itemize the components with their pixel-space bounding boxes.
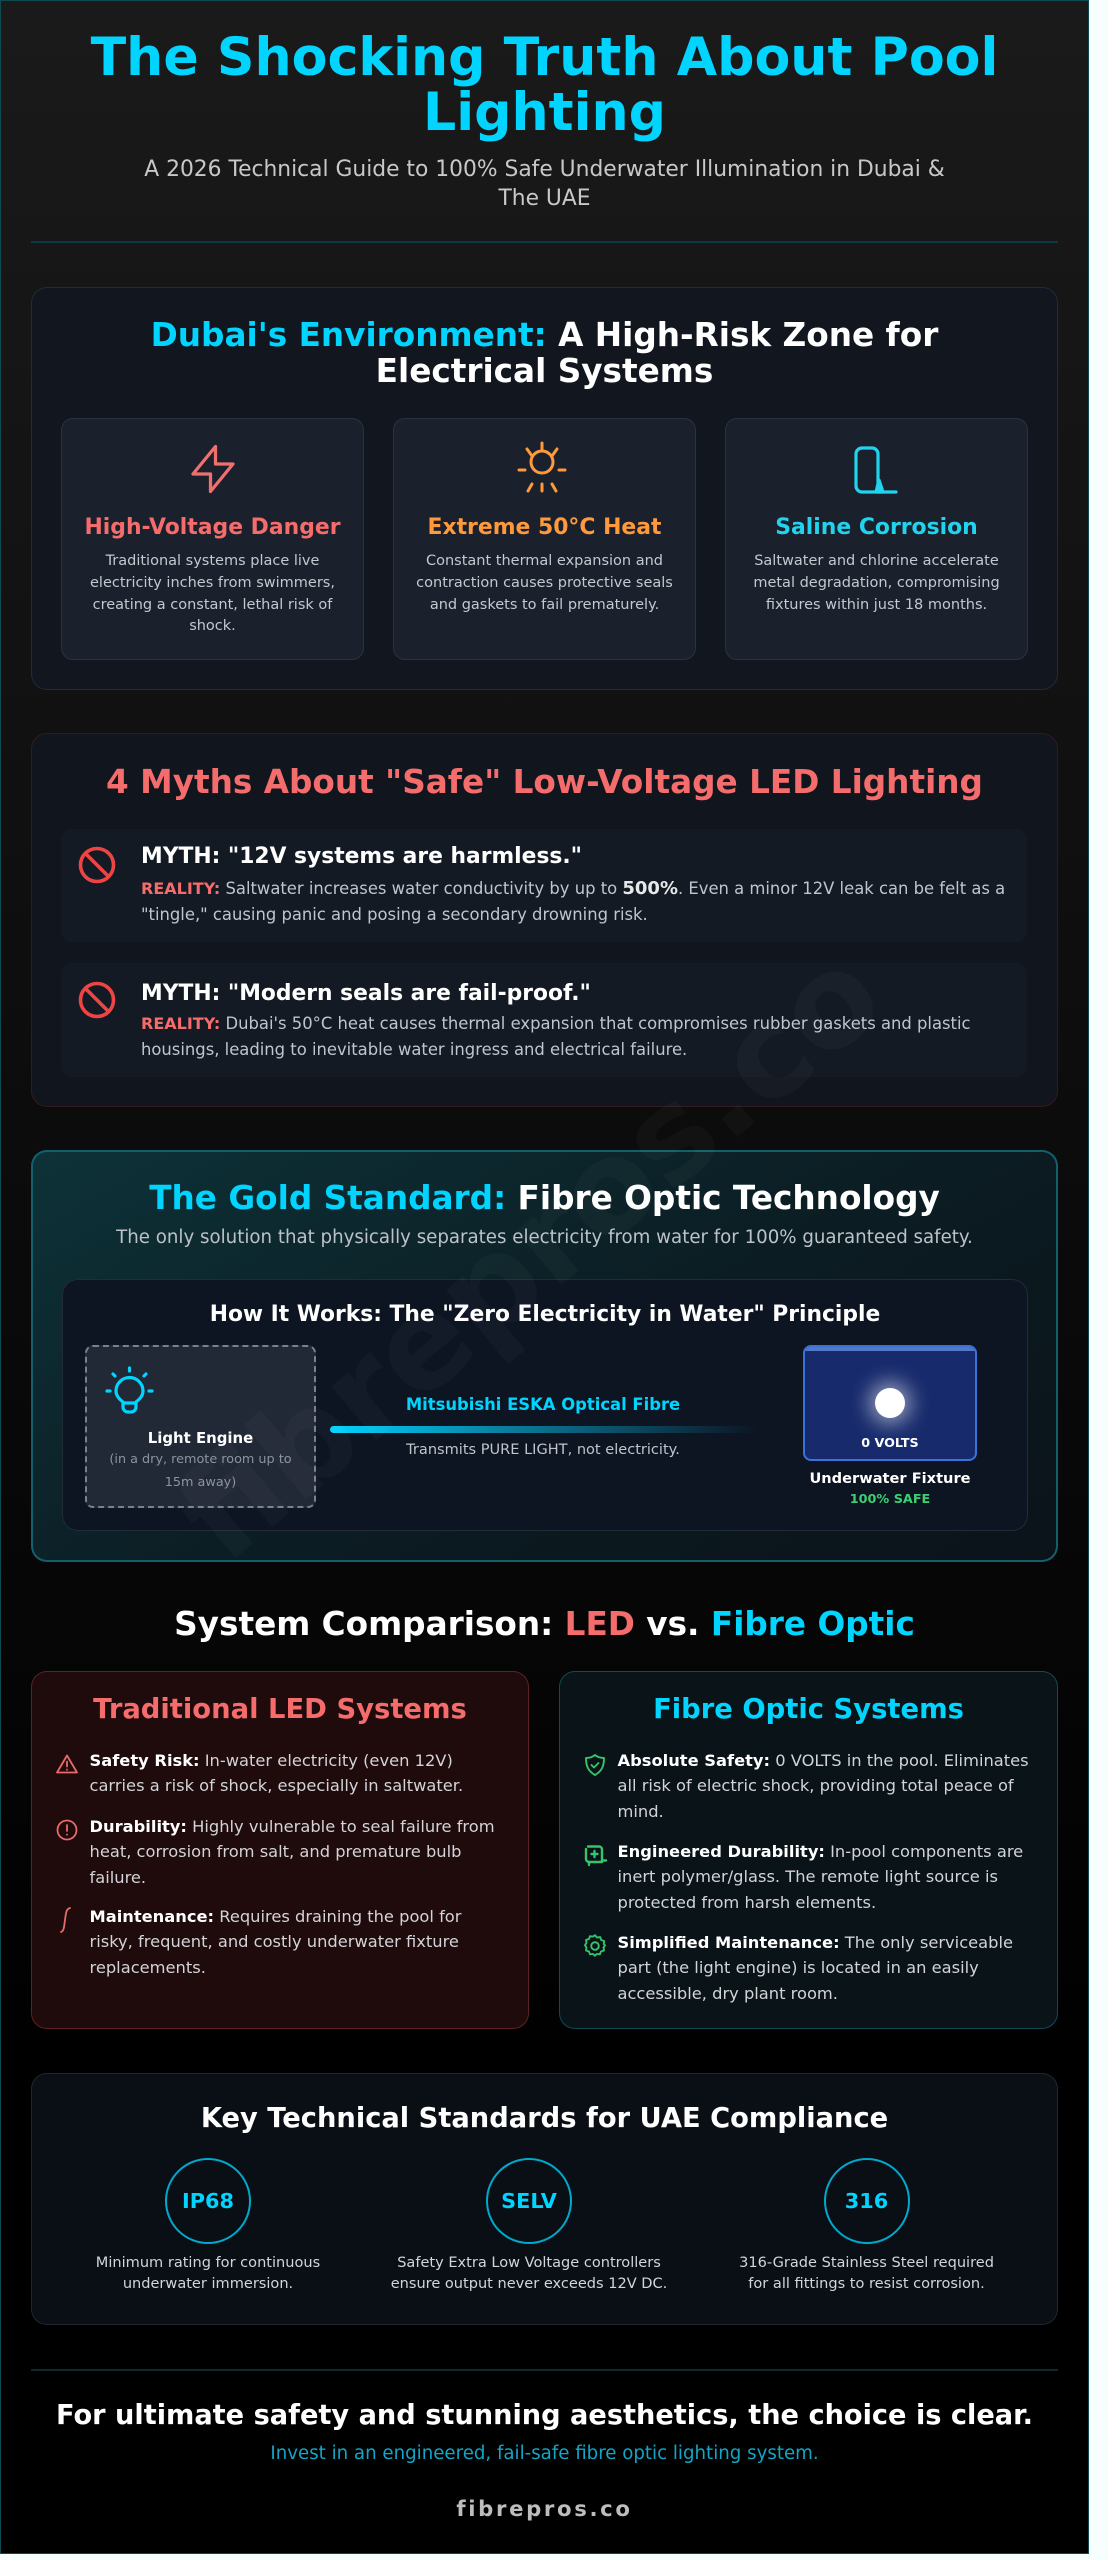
icon: warning triangle <box>56 1754 78 1774</box>
card text: fixtures within just 18 months. <box>766 597 987 613</box>
list item: engineered durability <box>618 1842 1023 1912</box>
badge: 316: 316 <box>845 2189 888 2213</box>
list item: simplified maintenance: accessible, dry plant room. <box>618 1984 838 2003</box>
heading: fibre: Fibre Optic Systems <box>653 1694 964 1725</box>
heading: LED: Traditional LED Systems <box>93 1694 467 1725</box>
list item: absolute safety: mind. <box>618 1802 664 1821</box>
panel: fibre optic systems <box>559 1671 1058 2029</box>
reality text: housings, leading to inevitable water ingress and electrical failure. <box>141 1040 687 1059</box>
list item: safety risk: carries a risk of shock, especially in saltwater. <box>90 1776 463 1795</box>
zero volts label: 0 VOLTS <box>861 1435 919 1450</box>
heading: environment <box>151 316 938 390</box>
list item: safety risk: Safety Risk: In-water electricity (even 12V) <box>90 1751 453 1770</box>
description: SELV <box>391 2254 667 2292</box>
reality text: REALITY: Dubai's 50°C heat causes thermal expansion that compromises rubber gaskets and plastic <box>141 1014 971 1033</box>
heading: gold standard: The Gold Standard: Fibre Optic Technology <box>149 1179 940 1217</box>
fixture label: Underwater Fixture <box>809 1470 971 1487</box>
panel: fibre optic gold standard <box>31 1150 1058 1562</box>
description: 316 <box>739 2254 994 2292</box>
icon: sun <box>518 442 566 493</box>
badge: 316 <box>824 2158 910 2244</box>
list item: absolute safety: all risk of electric shock, providing total peace of <box>618 1776 1014 1795</box>
heading: environment: Dubai's Environment: A High-Risk Zone for <box>151 316 938 354</box>
icon: gear <box>584 1934 606 1957</box>
card text: shock. <box>189 618 236 634</box>
subtitle <box>144 156 945 210</box>
subheading: The only solution that physically separates electricity from water for 100% guaranteed safety. <box>116 1227 973 1248</box>
reality text: "tingle," causing panic and posing a secondary drowning risk. <box>141 905 648 924</box>
reality text <box>141 878 1005 924</box>
description: IP68: underwater immersion. <box>123 2275 293 2292</box>
myth title: MYTH: "12V systems are harmless." <box>141 844 582 869</box>
reality text <box>141 1014 971 1059</box>
card title: Extreme 50°C Heat <box>428 515 661 540</box>
card: saline corrosion <box>725 418 1028 660</box>
light point <box>875 1388 905 1418</box>
description: 316: for all fittings to resist corrosion. <box>748 2275 985 2292</box>
card title: Saline Corrosion <box>775 515 978 540</box>
card: high-voltage danger <box>61 418 364 660</box>
card text: creating a constant, lethal risk of <box>93 597 332 613</box>
fibre note: Transmits PURE LIGHT, not electricity. <box>406 1441 680 1458</box>
safe label: 100% SAFE <box>850 1492 930 1507</box>
card text <box>90 553 335 634</box>
panel: myths <box>31 733 1058 1107</box>
badge: IP68 <box>165 2158 251 2244</box>
list item: maintenance: replacements. <box>90 1958 206 1977</box>
underwater fixture <box>803 1345 977 1461</box>
card text: Constant thermal expansion and <box>426 553 663 569</box>
myth title: MYTH: "Modern seals are fail-proof." <box>141 981 591 1006</box>
panel: technical standards <box>31 2073 1058 2325</box>
icon: lightning bolt <box>191 444 235 494</box>
myth card 1 <box>61 829 1027 942</box>
card text <box>753 553 1000 613</box>
card text: Traditional systems place live <box>106 553 319 569</box>
icon: prohibited <box>78 846 116 884</box>
list item: simplified maintenance: part (the light engine) is located in an easily <box>618 1958 979 1977</box>
brand: fibrepros.co <box>456 2496 633 2521</box>
diagram heading: How It Works: The "Zero Electricity in Water" Principle <box>210 1302 880 1327</box>
light engine note <box>109 1452 292 1490</box>
subtitle: A 2026 Technical Guide to 100% Safe Underwater Illumination in Dubai & <box>144 156 945 182</box>
icon: shield check <box>585 1754 605 1776</box>
description: 316: 316-Grade Stainless Steel required <box>739 2254 994 2271</box>
card text: contraction causes protective seals <box>416 575 673 591</box>
heading: environment: Electrical Systems <box>376 352 713 390</box>
title: Lighting <box>423 83 666 143</box>
heading: standards: Key Technical Standards for UAE Compliance <box>201 2103 888 2134</box>
icon: prohibited <box>78 982 116 1018</box>
icon: corrosion fixture <box>854 446 898 494</box>
title: The Shocking Truth About Pool <box>91 28 998 88</box>
subtitle: The UAE <box>498 186 591 210</box>
heading: system comparison: System Comparison: LED vs. Fibre Optic <box>174 1605 915 1643</box>
list item: maintenance: risky, frequent, and costly underwater fixture <box>90 1932 459 1951</box>
reality text: REALITY: Saltwater increases water conductivity by up to 500%. Even a minor 12V leak can be felt as a <box>141 878 1005 899</box>
card text <box>416 553 673 613</box>
list item: maintenance <box>90 1907 462 1977</box>
list item: durability: heat, corrosion from salt, and premature bulb <box>90 1842 461 1861</box>
light engine label: Light Engine <box>148 1429 253 1447</box>
badge: SELV <box>486 2158 572 2244</box>
list item: durability: failure. <box>90 1868 146 1887</box>
list item: absolute safety: Absolute Safety: 0 VOLTS in the pool. Eliminates <box>618 1751 1029 1770</box>
list item: maintenance: Maintenance: Requires draining the pool for <box>90 1907 461 1926</box>
card text: metal degradation, compromising <box>753 575 1000 591</box>
card text: Saltwater and chlorine accelerate <box>754 553 999 569</box>
title <box>90 28 998 143</box>
card title: High-Voltage Danger <box>84 515 341 540</box>
heading: myths: 4 Myths About "Safe" Low-Voltage LED Lighting <box>106 763 983 801</box>
light engine box <box>85 1345 316 1508</box>
card: extreme heat <box>393 418 696 660</box>
list item: engineered durability: inert polymer/glass. The remote light source is <box>618 1867 998 1886</box>
description: IP68: Minimum rating for continuous <box>96 2254 320 2271</box>
fibre label: Mitsubishi ESKA Optical Fibre <box>406 1395 680 1414</box>
description: IP68 <box>96 2254 320 2292</box>
list item: engineered durability: protected from harsh elements. <box>618 1893 876 1912</box>
card text: and gaskets to fail prematurely. <box>430 597 659 613</box>
badge: SELV: SELV <box>501 2189 557 2213</box>
description: SELV: Safety Extra Low Voltage controllers <box>397 2254 661 2271</box>
icon: durable block <box>584 1845 608 1866</box>
fibre cable <box>330 1426 759 1432</box>
list item: absolute safety <box>618 1751 1029 1821</box>
list item: durability <box>90 1817 495 1887</box>
watermark: fibrepros.co <box>149 919 910 1591</box>
list item: durability: Durability: Highly vulnerable to seal failure from <box>90 1817 495 1836</box>
icon: integral squiggle <box>60 1907 71 1933</box>
card text: electricity inches from swimmers, <box>90 575 335 591</box>
icon: light bulb <box>105 1366 154 1414</box>
description: SELV: ensure output never exceeds 12V DC. <box>391 2275 667 2292</box>
icon: alert circle <box>56 1820 78 1840</box>
fixture top band <box>805 1347 975 1351</box>
panel: traditional LED systems <box>31 1671 529 2029</box>
list item: safety risk <box>90 1751 463 1795</box>
diagram: how it works <box>62 1279 1028 1531</box>
myth card 2 <box>61 963 1027 1077</box>
list item: engineered durability: Engineered Durability: In-pool components are <box>618 1842 1023 1861</box>
call to action subtext: Invest in an engineered, fail-safe fibre optic lighting system. <box>270 2443 819 2464</box>
panel: Dubai's environment <box>31 287 1058 690</box>
list item: simplified maintenance <box>618 1933 1013 2003</box>
light engine note: 15m away) <box>165 1475 236 1490</box>
light engine note: (in a dry, remote room up to <box>109 1452 292 1467</box>
badge: IP68: IP68 <box>182 2189 234 2213</box>
call to action: For ultimate safety and stunning aesthetics, the choice is clear. <box>56 2400 1033 2431</box>
list item: simplified maintenance: Simplified Maintenance: The only serviceable <box>618 1933 1013 1952</box>
